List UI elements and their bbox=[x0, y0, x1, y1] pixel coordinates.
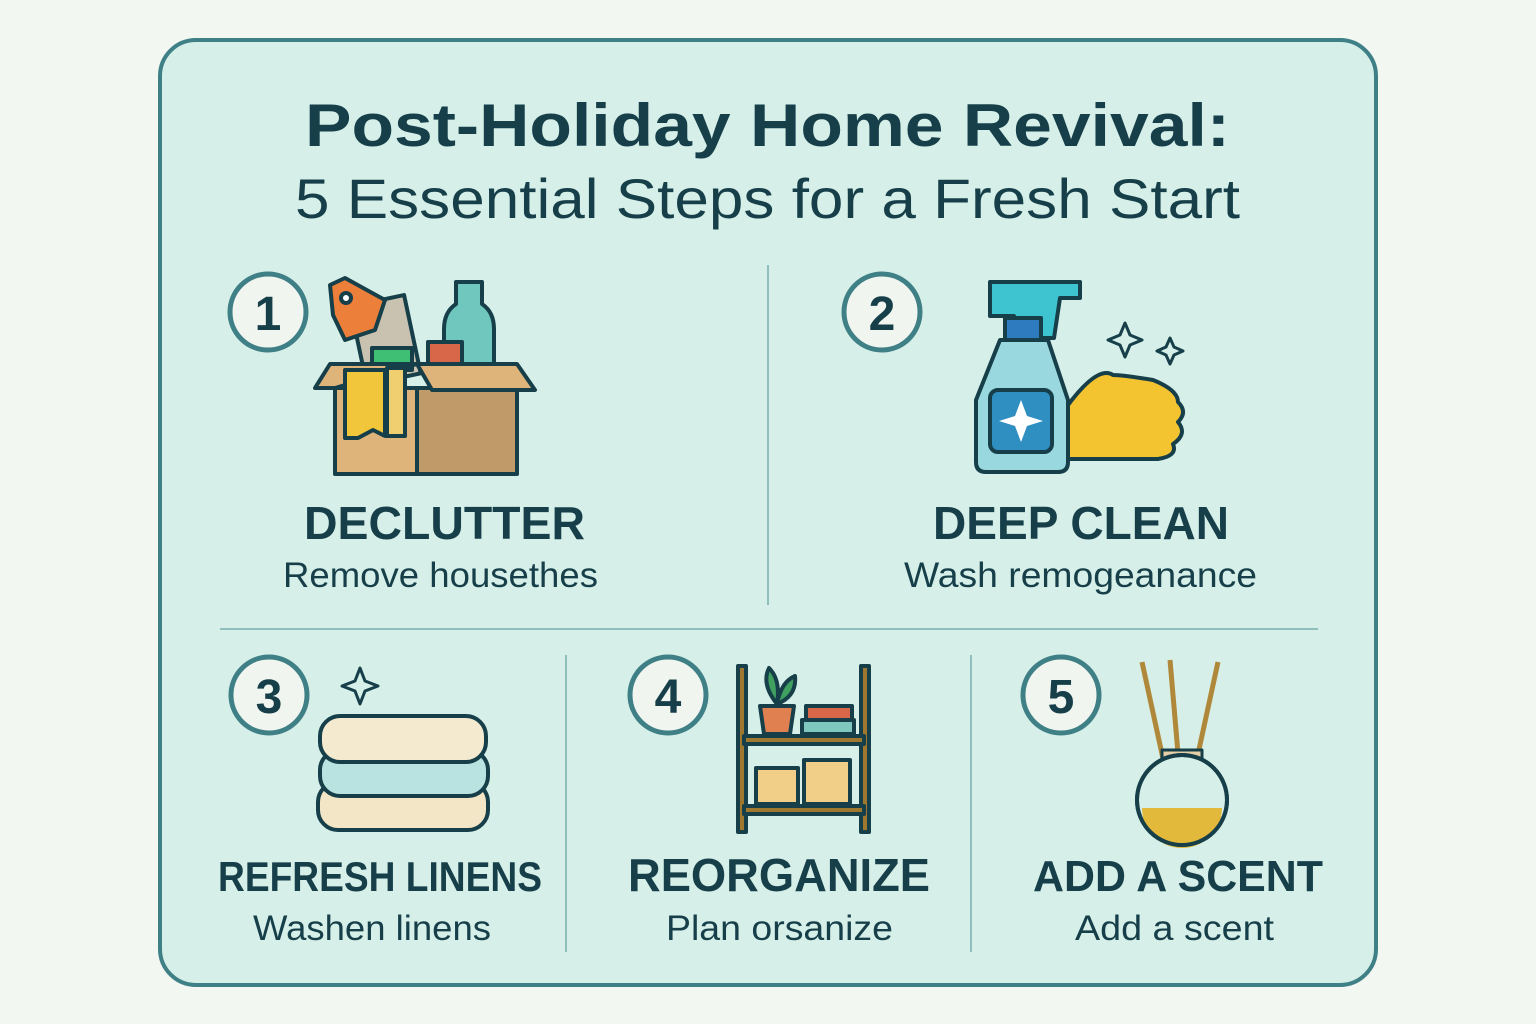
step 3: refresh linens bbox=[218, 657, 542, 948]
label: refresh linens: REFRESH LINENS bbox=[218, 853, 542, 900]
text: scent description: Add a scent bbox=[1075, 909, 1274, 948]
icon: shelf bbox=[738, 666, 869, 832]
text: reorganize description: Plan orsanize bbox=[666, 909, 893, 948]
label: declutter: DECLUTTER bbox=[304, 497, 585, 549]
number badge 2: 2 bbox=[869, 288, 895, 341]
number badge 4 bbox=[630, 657, 706, 733]
number badge 1 bbox=[230, 274, 306, 350]
label: deep clean: DEEP CLEAN bbox=[933, 497, 1229, 549]
icon: folded towels bbox=[318, 668, 488, 830]
number badge 4: 4 bbox=[655, 671, 682, 724]
number badge 2 bbox=[844, 274, 920, 350]
text: deep clean description: Wash remogeanance bbox=[904, 556, 1257, 595]
step 2: deep clean bbox=[844, 274, 1257, 595]
number badge 1: 1 bbox=[255, 288, 281, 341]
icon: box of items bbox=[315, 278, 535, 474]
icon: spray bottle and glove bbox=[976, 282, 1183, 472]
step 4: reorganize bbox=[628, 657, 930, 948]
subtitle: 5 Essential Steps for a Fresh Start bbox=[295, 167, 1240, 230]
number badge 5: 5 bbox=[1048, 671, 1074, 724]
icon: reed diffuser bbox=[1137, 660, 1227, 848]
panel: main card bbox=[160, 40, 1376, 985]
text: declutter description: Remove housethes bbox=[283, 556, 598, 595]
label: add a scent: ADD A SCENT bbox=[1033, 852, 1323, 901]
text: linens description: Washen linens bbox=[253, 909, 491, 948]
step 5: add a scent bbox=[1023, 657, 1323, 948]
number badge 3: 3 bbox=[256, 671, 282, 724]
number badge 3 bbox=[231, 657, 307, 733]
label: reorganize: REORGANIZE bbox=[628, 849, 930, 901]
title: Post-Holiday Home Revival: bbox=[305, 92, 1230, 159]
step 1: declutter bbox=[230, 274, 598, 595]
number badge 5 bbox=[1023, 657, 1099, 733]
